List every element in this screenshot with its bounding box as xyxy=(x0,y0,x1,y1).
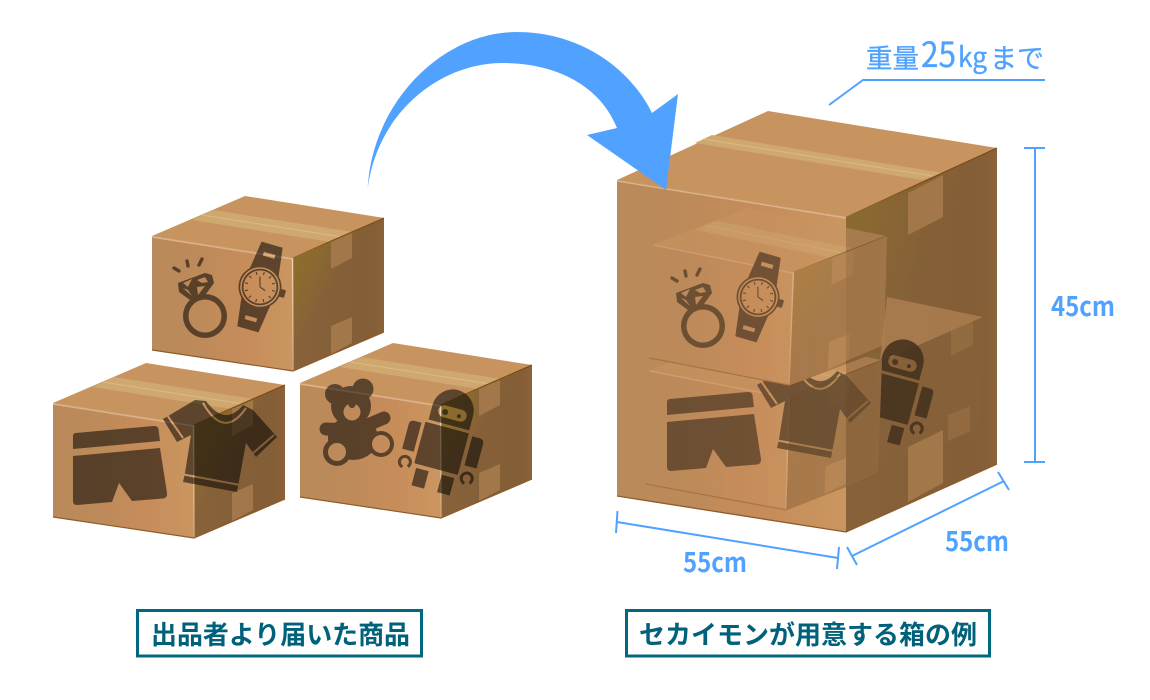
caption: example box from Sekaimon: セカイモンが用意する箱の例 xyxy=(639,615,977,652)
callout: weight limit: まで xyxy=(990,37,1044,76)
caption: items from sellers: 出品者より届いた商品 xyxy=(151,615,410,652)
dimension: depth 55cm: 55cm xyxy=(945,520,1009,559)
box: shorts and T-shirt xyxy=(53,363,290,538)
box: teddy bear and robot xyxy=(300,343,532,518)
callout: weight limit: kg xyxy=(958,36,987,76)
callout: weight limit: 25 xyxy=(921,27,956,78)
dimension: depth 55cm xyxy=(847,472,1009,565)
dimension: height 45cm: 45cm xyxy=(1051,285,1115,324)
panel: seller parcels xyxy=(53,196,532,538)
dimension: width 55cm: 55cm xyxy=(683,541,747,580)
arrow: parcels into large box xyxy=(368,32,678,190)
panel: large consolidated box xyxy=(617,111,997,532)
callout: weight limit: 重量 xyxy=(866,37,919,76)
callout: weight limit xyxy=(829,27,1045,105)
dimension: width 55cm xyxy=(616,511,839,580)
box: ring and watch xyxy=(152,196,384,371)
dimension: height 45cm xyxy=(1024,148,1115,462)
